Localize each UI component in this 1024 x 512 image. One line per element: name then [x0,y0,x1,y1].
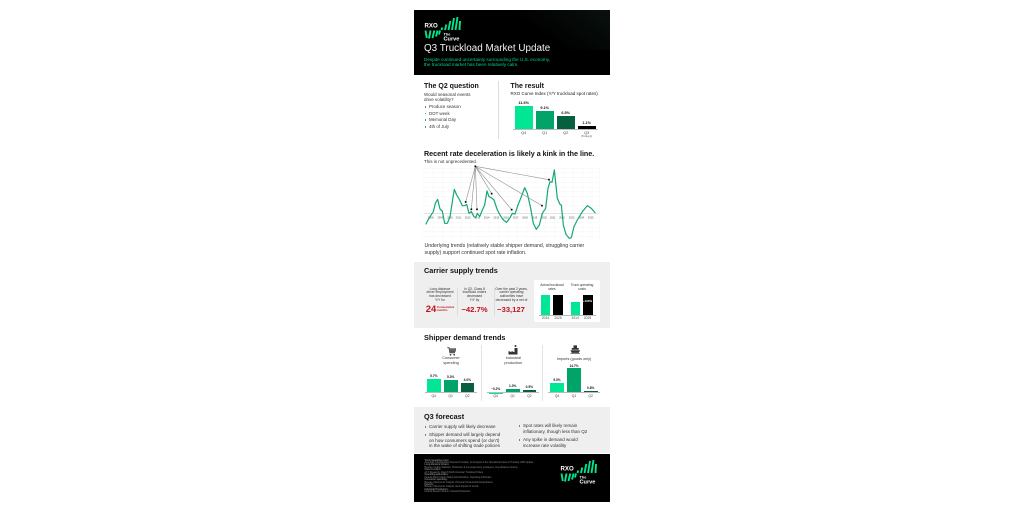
bar chart: industrial production: −0.2% [491,387,500,391]
stat: driver employment: Consecutive [437,305,454,309]
heading: the result: The result [510,82,544,90]
forecast item: demand spike: Any spike in demand would [523,437,578,442]
stat: class 8 orders: In Q2, Class 8 [464,286,485,290]
panel: consumer spending [425,347,477,398]
bar chart: imports: Q1 [572,394,576,398]
footer sources: Bureau of Economic Analysis, Real Imports of Goods [424,486,479,488]
panel: Q3 forecast [414,407,610,452]
bar chart: RXO Curve Index: Q2 [563,130,568,134]
chart subtitle: RXO Curve Index (Y/Y truckload spot rates) [510,91,598,96]
chart takeaway text: supply) support continued spot rate inflation. [424,250,526,256]
chart intro text: This is not unprecedented. [424,158,477,164]
card: rates versus costs: Actual truckload [540,282,564,286]
panel: footer [414,454,610,502]
icon: factory [508,345,518,354]
bullet list: Produce season [429,104,461,109]
stat: class 8 orders: Y/Y by [470,298,479,302]
footer sources: Federal Reserve Board, Industrial Production [424,491,470,493]
card: rates versus costs: Truck operating [571,282,593,286]
forecast item: shipper demand [424,432,500,449]
label: imports: Imports (goods only) [557,356,591,360]
footer sources: Class 8 orders: [424,469,441,471]
bar chart: consumer spending: Q1 [448,394,453,398]
bar chart: consumer spending: 4.0% [464,378,471,382]
header dot texture [521,10,610,50]
line chart: rate history: 2013 [475,216,481,219]
bar chart: RXO Curve Index: Q3 [584,130,589,134]
footer logo: RXO [560,465,573,472]
forecast item: shipper demand: on how consumers spend (or don't) [429,438,499,443]
stat: driver employment: driver employment [426,290,454,294]
bar chart: imports [548,364,600,398]
label: industrial production: Industrial [506,356,521,360]
card: rates versus costs: +100% [583,299,592,303]
bar chart: RXO Curve Index: 6.5% [561,111,570,115]
footer sources: Industrial Production: [424,489,448,491]
bar chart: consumer spending: 5.7% [430,374,437,378]
stat: operating authorities [494,288,534,316]
stat: class 8 orders: decreased [467,294,482,298]
question text: Would seasonal events [424,92,470,96]
bar chart: consumer spending: 5.3% [447,375,454,379]
stat: driver employment [426,286,454,314]
stat: driver employment: Y/Y for [435,298,445,302]
bar chart: RXO Curve Index: (To Aug 1) [581,135,592,138]
line chart: rate history: 2008 [428,216,434,219]
footer sources: Consumer spending: [424,479,447,481]
forecast item: shipper demand: in the wake of shifting trade policies [429,443,500,448]
stat: class 8 orders [457,288,495,316]
stat: driver employment: 24 [426,304,436,314]
bullet list [425,104,461,129]
bar chart: industrial production: 0.5% [526,385,533,389]
label: industrial production [504,356,522,365]
heading: carrier supply trends: Carrier supply trends [424,266,498,275]
icon: cargo ship [570,345,580,354]
footer sources: Federal Motor Carrier Safety Administration, Operating Authorities [424,477,491,479]
forecast item: demand spike: increase rate volatility [523,443,566,448]
card: rates versus costs: 2025 [554,316,562,320]
footer sources: Truck operating costs: [424,460,449,462]
line chart: rate history: 2011 [456,216,462,219]
line chart: rate history: 2022 [559,216,565,219]
question text: drive volatility? [424,97,454,102]
header logo: RXO [424,22,438,30]
line chart: rate history: 2019 [532,216,538,219]
line chart: rate history [424,166,600,239]
header title: Q3 Truckload Market Update [424,43,550,54]
line chart: rate history: 2020 [541,216,547,219]
question text [424,92,470,102]
card: rates versus costs: 2014 [572,316,579,320]
bar chart: imports: Q4 [555,394,559,398]
stat: operating authorities: decreased by a net of [496,298,527,302]
line chart: rate history: 2014 [484,216,490,219]
label: consumer spending: spending [443,361,459,365]
bar chart: RXO Curve Index: Q1 [542,130,547,134]
card: rates versus costs [534,280,600,322]
forecast item: demand spike [518,437,578,448]
forecast item: spot rates: Spot rates will likely remain [523,423,577,428]
bar chart: industrial production [487,384,539,398]
footer logo [560,460,597,484]
line chart: rate history: 2012 [465,216,471,219]
card: rates versus costs: costs [578,286,586,290]
line chart: rate history: 2023 [569,216,575,219]
line chart: rate history: 2010 [447,216,453,219]
card: rates versus costs: 2025 [584,316,591,320]
panel: header [414,10,610,75]
bar chart: industrial production: Q4 [493,394,498,398]
footer sources: Imports: [424,484,434,486]
header subtitle [424,57,550,67]
panel: industrial production [481,345,543,401]
bullet list: 4th of July [429,124,449,129]
label: consumer spending: Consumer [442,356,460,360]
line chart: rate history: 2017 [513,216,519,219]
footer sources: Operating authorities: [424,474,448,476]
footer sources [424,459,534,493]
line chart: rate history: 2015 [494,216,500,219]
panel: imports [542,345,603,401]
footer logo: The [579,474,587,479]
bar chart: consumer spending: Q2 [465,394,470,398]
panel: the result [498,81,601,139]
footer sources: ACT Research, Class 8 North American Truckload Orders [424,472,483,474]
bar chart: imports: 5.0% [553,378,561,382]
heading: shipper demand trends: Shipper demand trends [424,332,506,342]
footer sources: Long-distance drivers: [424,464,449,466]
panel: the Q2 question [424,82,479,129]
line chart: rate history: 2021 [550,216,556,219]
heading: recent rate deceleration: Recent rate deceleration is likely a kink in the line. [424,150,594,158]
label: consumer spending [442,356,460,365]
panel: imports: 14.7% [569,364,579,368]
stat: operating authorities: −33,127 [497,304,525,314]
stat: class 8 orders: −42.7% [461,304,488,314]
forecast item: shipper demand: Shipper demand will largely depend [429,432,500,437]
line chart: rate history: 2009 [438,216,444,219]
line chart: rate history: 2016 [503,216,509,219]
bar chart: imports: 0.8% [587,386,594,390]
stat: driver employment: has decreased [429,294,451,298]
bar chart: consumer spending: Q4 [432,394,436,398]
bar chart: industrial production: 1.0% [509,384,516,388]
stat: class 8 orders: truckload orders [463,290,486,294]
icon: shopping cart [447,347,456,356]
stat: operating authorities: authorities have [500,294,523,298]
line chart: rate history: 2024 [579,216,585,219]
header logo: The [444,32,451,36]
heading: Q3 forecast: Q3 forecast [424,412,464,421]
bar chart: consumer spending [425,374,477,398]
bullet list: DOT week [429,111,450,116]
forecast item: spot rates: inflationary, though less than Q2 [523,429,587,434]
forecast item: spot rates [518,423,587,435]
stat: operating authorities: Over the past 2 years, [495,286,528,290]
footer sources: American Transportation Research Institute, An Analysis of the Operational Costs of Trucking: 2025 Update [424,462,533,464]
footer sources: Bureau of Labor Statistics, Production & non-supervisory employees, long-distance trucking [424,467,518,469]
forecast item: carrier supply: Carrier supply will likely decrease [429,424,496,429]
card: rates versus costs: rates [548,286,556,290]
card: rates versus costs: 2014 [542,316,549,320]
bar chart: imports: Q2 [588,394,593,398]
header subtitle: the truckload market has been relatively calm. [424,62,518,67]
bar chart: RXO Curve Index [513,101,598,138]
bar chart: RXO Curve Index: 1.1% [582,121,591,125]
bullet list: Memorial Day [429,117,456,122]
stat: driver employment: months [437,308,447,312]
label: industrial production: production [504,361,522,365]
bar chart: industrial production: Q2 [527,394,532,398]
bar chart: RXO Curve Index: 11.6% [518,101,529,105]
bar chart: industrial production: Q1 [510,394,515,398]
heading: the Q2 question: The Q2 question [424,82,479,90]
stat: driver employment: Long-distance [430,286,450,290]
panel: carrier supply trends [414,262,610,328]
footer sources: Bureau of Economic Analysis, Personal Consumption Expenditures [424,482,493,484]
line chart: rate history: 2025 [588,216,594,219]
chart takeaway text: Underlying trends (relatively stable shipper demand, struggling carrier [424,242,584,248]
chart takeaway text [424,242,584,256]
header subtitle: Despite continued uncertainty surrounding the U.S. economy, [424,57,550,62]
stat: operating authorities: carrier operating [499,290,524,294]
bar chart: RXO Curve Index: Q4 [521,130,526,134]
header logo [424,16,461,42]
line chart: rate history: 2018 [522,216,528,219]
bar chart: RXO Curve Index: 9.1% [540,106,549,110]
